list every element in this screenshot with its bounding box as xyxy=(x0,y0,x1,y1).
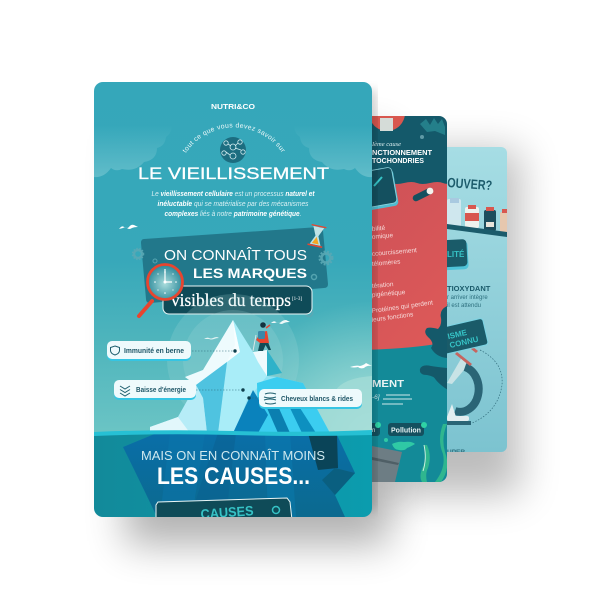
section: red panel xyxy=(372,182,447,350)
tag: mécanisme inconnu xyxy=(447,318,488,354)
tag: mécanisme inconnu: CONNU xyxy=(449,335,480,350)
label box: visibles du temps: visibles du temps xyxy=(171,290,291,310)
text: antioxydant xyxy=(447,286,490,307)
barrel and spill xyxy=(372,438,415,482)
text: antioxydant: il est attendu xyxy=(447,303,481,309)
tag: qualité: LITÉ xyxy=(447,250,465,259)
text: causes list xyxy=(371,225,434,324)
seaweed xyxy=(420,424,447,482)
heading: on connait tous les marques: ON CONNAÎT TOUS xyxy=(164,247,307,264)
heading: environnement: MENT xyxy=(372,378,405,390)
birds xyxy=(119,225,290,340)
panel: on connait xyxy=(141,227,328,303)
icon: hourglass xyxy=(308,225,326,247)
label: immunite xyxy=(107,341,237,361)
halo behind iceberg xyxy=(167,294,299,426)
infographic cards mockup xyxy=(94,82,542,568)
back card: supplement page xyxy=(447,147,507,452)
text: causes list: pigénétique xyxy=(372,289,406,299)
waterline xyxy=(94,430,372,436)
clouds: right horizon xyxy=(296,376,372,432)
icon: cells xyxy=(220,137,246,163)
text: causes list: tération xyxy=(372,281,394,290)
drop shadow xyxy=(125,135,520,545)
tag: mécanisme inconnu: ISME xyxy=(447,328,468,341)
bottles on a shelf xyxy=(447,198,509,237)
intro paragraph: Le vieillissement cellulaire est un processus naturel et xyxy=(152,189,315,198)
text: antioxydant: TIOXYDANT xyxy=(447,284,491,293)
tag: causes: CAUSES xyxy=(200,503,254,522)
text: causes list: Protéines qui perdent xyxy=(371,299,434,315)
pill: pollution xyxy=(388,422,427,436)
pill: previous factor: n xyxy=(372,428,375,434)
underwater iceberg xyxy=(123,433,355,517)
section: teal bottom xyxy=(372,344,447,482)
pill: previous factor xyxy=(372,422,381,436)
arc subtitle: tout ce que vous devez savoir sur xyxy=(182,122,285,152)
text: causes list: télomères xyxy=(372,258,401,268)
climber xyxy=(253,322,271,351)
middle card: causes page xyxy=(372,116,447,482)
text: causes list: ccourcissement xyxy=(372,247,417,258)
clouds: top left and right xyxy=(94,135,372,178)
text: causes list: bilité xyxy=(372,225,386,233)
microscope xyxy=(447,343,502,425)
underwater background xyxy=(94,432,372,517)
label box: visibles du temps xyxy=(163,286,312,314)
shadow of front card xyxy=(366,90,376,510)
heading: environnement xyxy=(372,378,412,404)
label: baisse: Baisse d'énergie xyxy=(136,385,186,394)
heading: les causes: LES CAUSES... xyxy=(157,463,310,490)
pill: pollution: Pollution xyxy=(391,428,421,434)
front card: le vieillissement xyxy=(94,82,372,517)
section: header dark xyxy=(372,116,447,184)
label box: visibles du temps: [1-3] xyxy=(292,297,302,302)
label: immunite: Immunité en berne xyxy=(124,346,184,355)
heading: trouver: OUVER? xyxy=(447,175,493,193)
heading: environnement: -6] xyxy=(372,394,380,401)
text: antioxydant: r arriver intègre xyxy=(447,295,488,301)
title: LE VIEILLISSEMENT xyxy=(138,164,329,183)
heading: dysfonctionnement: Ième cause xyxy=(371,141,401,148)
label: baisse xyxy=(114,380,245,400)
heading: on connait tous les marques: LES MARQUES xyxy=(193,265,307,281)
decorative coral xyxy=(420,118,445,135)
heading: on connait tous les marques xyxy=(164,247,307,281)
heading: dysfonctionnement xyxy=(372,142,432,163)
icon: magnifier clock xyxy=(139,264,182,316)
smoke cloud xyxy=(420,306,448,390)
bird: right cloud xyxy=(350,363,372,368)
gears xyxy=(132,248,332,316)
intro paragraph xyxy=(152,189,315,218)
heading: dysfonctionnement: TOCHONDRIES xyxy=(372,158,424,165)
label: cheveux: Cheveux blancs & rides xyxy=(281,394,353,403)
intro paragraph: complexes liés à notre patrimoine génétique. xyxy=(164,209,301,218)
icon: toggle xyxy=(416,188,433,198)
label: cheveux xyxy=(247,389,362,409)
clipped footer text: UPER xyxy=(447,449,465,456)
heading: mais on en connait moins: MAIS ON EN CONNAÎT MOINS xyxy=(141,448,325,463)
text: causes list: leurs fonctions xyxy=(371,311,415,324)
tag: qualité xyxy=(447,239,468,270)
tag: causes xyxy=(156,498,292,522)
icon: lifebuoy xyxy=(372,116,405,131)
iceberg xyxy=(150,320,330,433)
heading: dysfonctionnement: NCTIONNEMENT xyxy=(372,150,433,157)
tag: ADN xyxy=(372,167,398,210)
intro paragraph: inéluctable qui se matérialise par des mécanismes xyxy=(158,199,309,208)
brand: NUTRI&CO xyxy=(211,102,255,111)
text: causes list: omique xyxy=(372,232,394,241)
background sky xyxy=(94,82,372,437)
